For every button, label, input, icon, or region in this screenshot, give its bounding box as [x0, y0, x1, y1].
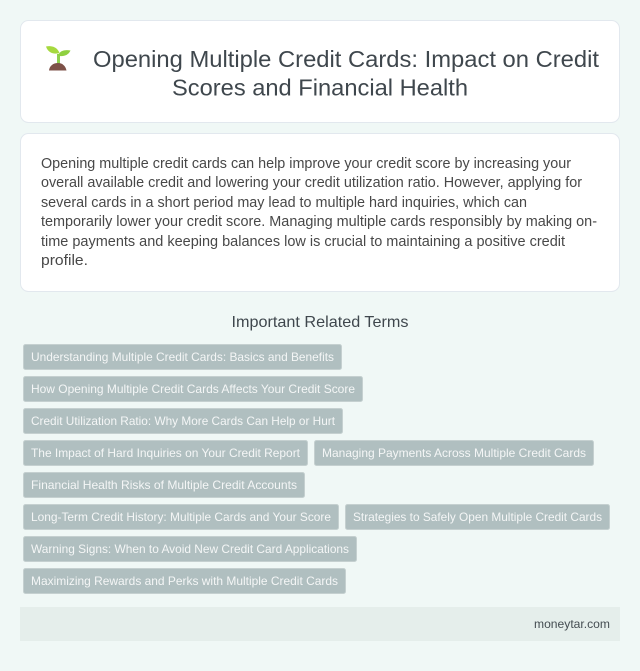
tag — [24, 472, 304, 498]
tag list — [24, 344, 610, 594]
panel: intro paragraph: several cards in a short period may lead to multiple hard inquiries, which can — [41, 195, 527, 211]
title text: Opening Multiple Credit Cards: Impact on Credit — [93, 46, 599, 72]
footer — [20, 607, 620, 641]
tag — [24, 568, 346, 594]
tag — [346, 504, 610, 530]
title text — [93, 46, 599, 100]
heading: related terms: Important Related Terms — [232, 314, 408, 331]
tag: Credit Utilization Ratio: Why More Cards Can Help or Hurt — [31, 414, 336, 428]
tag: Warning Signs: When to Avoid New Credit Card Applications — [31, 542, 349, 556]
tag: Long-Term Credit History: Multiple Cards and Your Score — [31, 510, 331, 524]
tag: The Impact of Hard Inquiries on Your Credit Report — [31, 446, 301, 460]
tag: Strategies to Safely Open Multiple Credit Cards — [353, 510, 602, 524]
panel: intro paragraph: temporarily lower your credit score. Managing multiple cards responsibly by making on- — [41, 214, 597, 230]
tag — [24, 504, 338, 530]
tag: Financial Health Risks of Multiple Credit Accounts — [31, 478, 297, 492]
panel: intro paragraph: Opening multiple credit cards can help improve your credit score by increasing your — [41, 156, 571, 172]
panel: intro paragraph: profile. — [41, 253, 88, 269]
footer: moneytar.com — [534, 617, 610, 631]
panel: intro paragraph: time payments and keeping balances low is crucial to maintaining a positive credit — [41, 234, 565, 250]
panel: intro paragraph: overall available credit and lowering your credit utilization ratio. However, applying for — [41, 175, 582, 191]
icon: sprout — [46, 46, 70, 70]
tag — [24, 408, 342, 434]
tag — [24, 536, 356, 562]
panel: title — [20, 20, 620, 122]
panel: intro paragraph — [20, 134, 620, 292]
tag — [24, 376, 362, 402]
tag — [314, 440, 594, 466]
tag — [24, 440, 308, 466]
tag: Understanding Multiple Credit Cards: Basics and Benefits — [31, 350, 334, 364]
title text: Scores and Financial Health — [172, 74, 468, 100]
tag — [24, 344, 342, 370]
tag: How Opening Multiple Credit Cards Affects Your Credit Score — [31, 382, 355, 396]
tag: Maximizing Rewards and Perks with Multiple Credit Cards — [31, 574, 338, 588]
tag: Managing Payments Across Multiple Credit Cards — [322, 446, 586, 460]
